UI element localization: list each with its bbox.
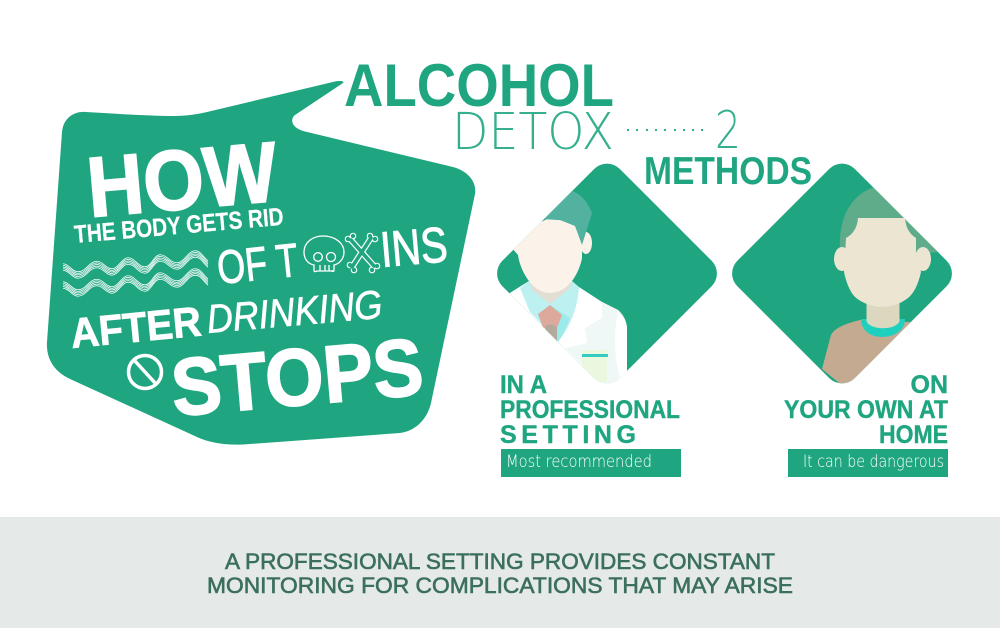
label: on your own at home — [784, 371, 948, 449]
heading: HOW: HOW — [83, 125, 282, 236]
tag: it can be dangerous: It can be dangerous — [803, 452, 944, 472]
label: on your own at home: ON — [910, 371, 948, 399]
heading: of T: OF T — [215, 233, 301, 294]
tag: most recommended: Most recommended — [506, 452, 652, 472]
number: 2: 2 — [715, 101, 741, 161]
panel: professional setting — [490, 156, 724, 477]
panel: bottom banner — [0, 517, 1000, 628]
icon: waves — [63, 251, 208, 296]
dotted leader — [627, 129, 703, 131]
diamond background — [725, 156, 959, 391]
heading: detox: DETOX — [452, 103, 614, 162]
title: alcohol detox 2 methods — [344, 52, 812, 193]
icon: skull — [304, 236, 344, 272]
heading: the body gets rid: THE BODY GETS RID — [73, 203, 285, 249]
heading: after: AFTER — [68, 298, 203, 357]
banner text — [207, 549, 793, 598]
heading: stops: STOPS — [168, 322, 427, 434]
label: on your own at home: YOUR OWN AT — [784, 396, 948, 424]
heading: methods: METHODS — [644, 150, 812, 193]
heading: INS: INS — [378, 216, 450, 278]
tag: most recommended — [501, 449, 681, 477]
heading: drinking: DRINKING — [205, 283, 384, 342]
speech bubble shape — [47, 81, 475, 445]
label: in a professional setting — [500, 371, 680, 449]
banner text: A PROFESSIONAL SETTING PROVIDES CONSTANT — [225, 549, 775, 574]
illustration: person at home — [822, 188, 938, 384]
heading: alcohol: ALCOHOL — [344, 52, 614, 119]
label: in a professional setting: PROFESSIONAL — [500, 396, 680, 424]
label: in a professional setting: IN A — [500, 371, 547, 399]
tag: it can be dangerous — [788, 449, 948, 477]
icon: prohibition sign — [128, 356, 162, 388]
label: in a professional setting: SETTING — [500, 421, 636, 449]
illustration: doctor — [505, 190, 627, 390]
diamond background — [490, 156, 724, 391]
label: on your own at home: HOME — [879, 421, 948, 449]
panel: speech bubble title — [47, 81, 475, 445]
panel: on your own at home — [725, 156, 959, 477]
icon: crossed bones — [345, 233, 380, 273]
banner text: MONITORING FOR COMPLICATIONS THAT MAY ARISE — [207, 573, 793, 598]
